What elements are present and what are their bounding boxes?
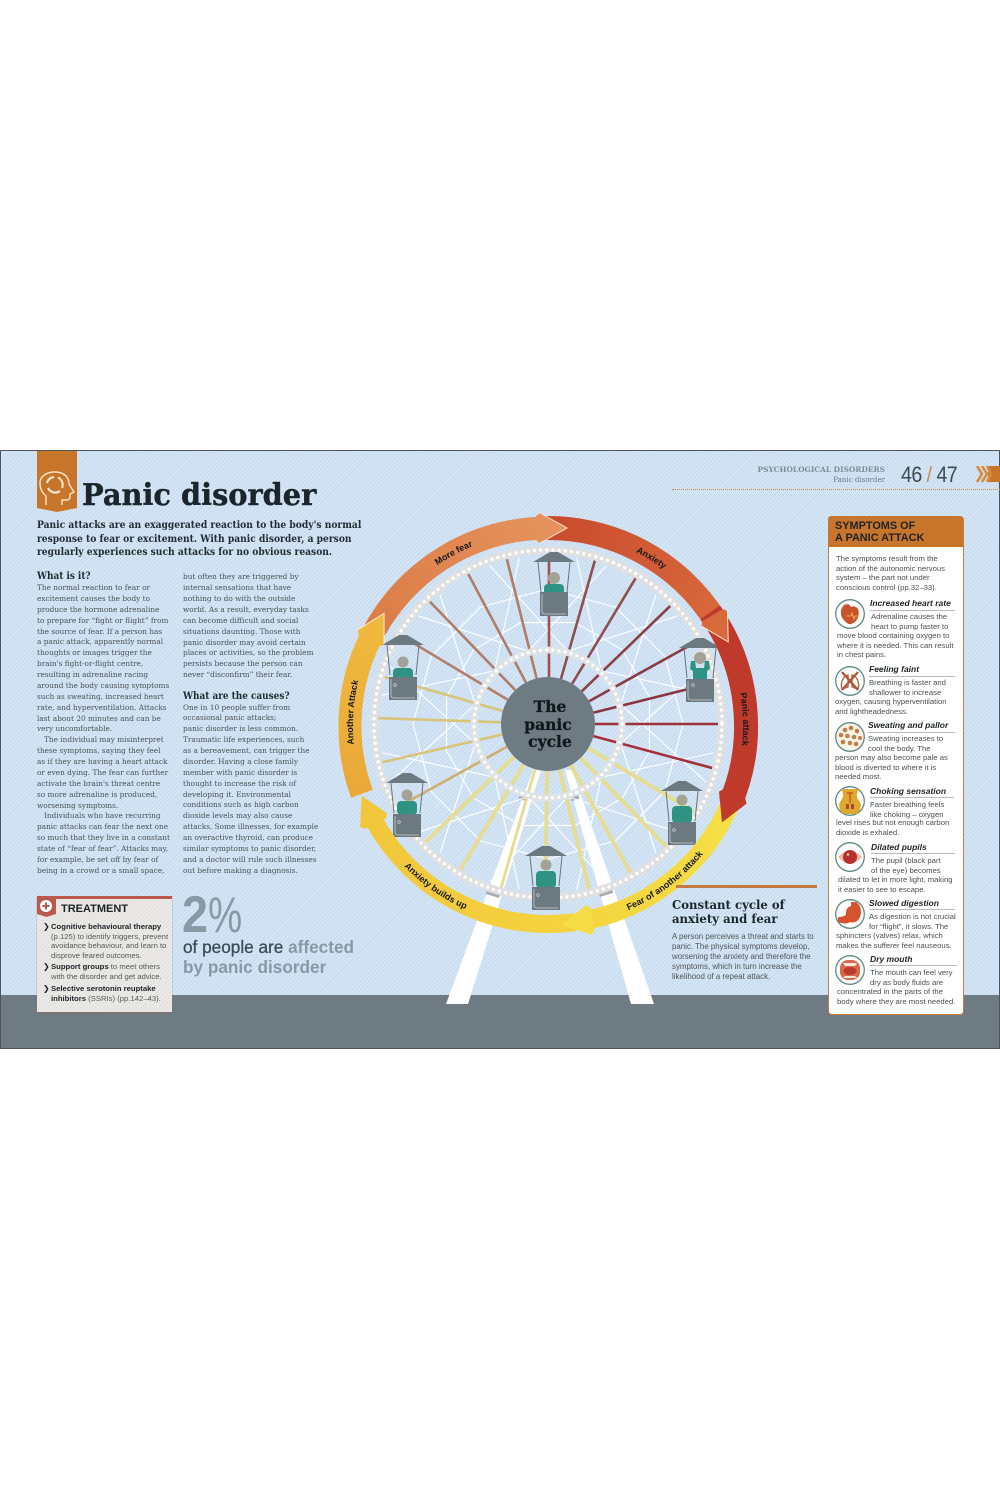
- symptom: dilated pupils: [835, 842, 955, 894]
- text: causes body: dioxide levels may also cause: [182, 811, 292, 820]
- symptom: feeling faint: [835, 664, 955, 716]
- text: causes body: an overactive thyroid, can produce: [182, 833, 313, 842]
- text: causes body: thought to increase the risk of: [182, 779, 296, 788]
- text: what is it body: a panic attack, apparently normal: [37, 637, 163, 646]
- text: causes body: and a doctor will rule such illnesses: [182, 855, 316, 864]
- text: what is it body: as if they are having a heart attack: [37, 757, 167, 766]
- icon: stomach: [835, 899, 865, 929]
- icon: throat: [835, 786, 865, 816]
- symptom: sweating and pallor: blood is diverted to where it is: [835, 763, 936, 772]
- text: what is it body: Individuals who have recurring: [44, 811, 161, 820]
- text: causes body: One in 10 people suffer from: [182, 703, 290, 712]
- symptom text: [870, 968, 952, 987]
- symptoms intro text: conscious control (pp.32–33).: [836, 582, 937, 592]
- panel: symptoms of a panic attack: [828, 516, 964, 1015]
- symptom: dry mouth: concentrated in the parts of the: [837, 987, 943, 996]
- symptom: dry mouth: [835, 954, 957, 1006]
- text: what is it body: [37, 583, 170, 875]
- callout heading: anxiety and fear: [672, 912, 777, 926]
- heading: what is it: What is it?: [37, 571, 91, 582]
- text: what is it body: so more adrenaline is produced,: [37, 790, 157, 799]
- big number: %: [208, 887, 241, 943]
- symptom title: Feeling faint: [869, 664, 919, 674]
- treatment list: (p.125) to identify triggers, prevent: [51, 932, 168, 940]
- symptom text: [870, 800, 944, 819]
- symptom text: of the eye) becomes: [871, 866, 941, 875]
- text: what is it body: activate the brain's threat centre: [37, 779, 160, 788]
- symptom: increased heart rate: move blood containing oxygen to: [837, 631, 949, 640]
- hub: the panic cycle: panic: [524, 715, 572, 734]
- text: what is it body: worsening symptoms.: [37, 800, 118, 810]
- symptoms intro text: action of the autonomic nervous: [836, 564, 945, 572]
- hub: the panic cycle: The: [534, 697, 566, 716]
- white wheel lattice: [382, 558, 714, 890]
- text: what is it body: produce the hormone adrenaline: [37, 605, 159, 614]
- treatment list: ❯: [43, 962, 50, 971]
- text: what is it body: around the body causing symptoms: [37, 681, 169, 690]
- big number: [182, 886, 241, 944]
- treatment top rule: [37, 896, 172, 899]
- intro text: Panic attacks are an exaggerated reaction to the body's normal: [37, 519, 361, 531]
- symptoms intro text: system – the part not under: [836, 573, 930, 582]
- text: causes body: similar symptoms to panic disorder,: [182, 844, 316, 853]
- text: what is it body: The normal reaction to fear or: [37, 583, 150, 592]
- symptom text: As digestion is not crucial: [869, 912, 956, 921]
- text: causes body: [182, 703, 318, 875]
- statistic caption: of people are affected: [183, 937, 354, 957]
- symptom text: cool the body. The: [868, 744, 931, 753]
- text: what is it body: brain's fight-or-flight centre,: [37, 659, 143, 668]
- arrow ring: six-stage cycle: Fear of another attack: [626, 851, 703, 910]
- symptom title: Sweating and pallor: [868, 720, 948, 730]
- title: Panic disorder: [82, 478, 316, 513]
- callout body: likelihood of a repeat attack.: [672, 972, 770, 981]
- symptom: dry mouth: body where they are most needed.: [837, 997, 955, 1006]
- text: causes body: as a bereavement, can trigger the: [182, 746, 309, 755]
- text: what is it body: resulting in adrenaline racing: [37, 670, 148, 679]
- arrow ring: six-stage cycle: Another Attack: [346, 680, 358, 744]
- symptoms header: A PANIC ATTACK: [835, 532, 924, 544]
- symptom text: The pupil (black part: [871, 856, 941, 865]
- statistic: 2%: [182, 886, 354, 977]
- gondola: bottom: [525, 846, 567, 910]
- symptom: dilated pupils: it easier to see to escape.: [838, 885, 926, 894]
- text: column two continuation: can become difficult and social: [182, 616, 298, 625]
- text: column two continuation: but often they are triggered by: [182, 572, 298, 581]
- wheel support legs: [446, 770, 654, 1004]
- heading: what are the causes: What are the causes?: [182, 690, 289, 702]
- symptom: sweating and pallor: needed most.: [835, 772, 882, 781]
- gondola: upper right, hands to head: [679, 638, 721, 702]
- symptom text: like choking – oxygen: [870, 810, 944, 819]
- icon: crossed lungs: [835, 666, 865, 696]
- text: causes body: attacks. Some illnesses, for example: [182, 822, 318, 831]
- callout body: panic. The physical symptoms develop,: [672, 942, 810, 951]
- arrow ring: six-stage cycle: More fear: [434, 542, 472, 565]
- arrow ring: six-stage cycle: Anxiety builds up: [404, 864, 466, 910]
- page background: [0, 450, 1000, 1049]
- panel: treatment: [37, 896, 172, 1012]
- text: what is it body: to prepare for “fight or flight” from: [37, 616, 168, 625]
- symptom title: Dry mouth: [870, 954, 912, 964]
- symptom text: Sweating increases to: [868, 734, 943, 743]
- text: column two continuation: nothing to do with the outside: [182, 594, 295, 603]
- symptom text: Breathing is faster and: [869, 678, 946, 687]
- icon: orange head badge: [37, 451, 77, 512]
- text: causes body: panic disorder is less common.: [182, 724, 298, 733]
- text: causes body: conditions such as high carbon: [182, 800, 298, 809]
- symptom text: [869, 912, 956, 931]
- running header: PSYCHOLOGICAL DISORDERS: [758, 465, 885, 474]
- text: causes body: out before making a diagnosis.: [182, 866, 297, 875]
- symptom title: Slowed digestion: [869, 898, 939, 908]
- treatment list: inhibitors (SSRIs) (pp.142–43).: [51, 994, 161, 1002]
- callout heading: Constant cycle of: [672, 898, 785, 912]
- text: what is it body: very uncomfortable.: [37, 724, 112, 733]
- text: what is it body: thoughts or images trigger the: [37, 648, 152, 657]
- text: column two continuation: world. As a result, everyday tasks: [182, 605, 308, 614]
- symptom: slowed digestion: makes the sufferer feel nauseous.: [836, 941, 952, 950]
- big number: 2: [182, 886, 208, 944]
- text: column two continuation: [182, 572, 314, 679]
- symptom: sweating and pallor: [835, 720, 955, 781]
- text: causes body: occasional panic attacks;: [182, 713, 276, 722]
- symptom text: The mouth can feel very: [870, 968, 952, 977]
- symptoms intro text: [836, 554, 945, 592]
- treatment list: ❯: [43, 984, 50, 993]
- text: column two continuation: situations daunting. Those with: [182, 627, 300, 636]
- gondola: lower left: [386, 773, 428, 837]
- icon: sweat drops: [835, 722, 865, 752]
- gondola: top: [533, 552, 575, 616]
- symptom: feeling faint: oxygen, causing hyperventilation: [835, 697, 947, 706]
- text: what is it body: last about 20 minutes and can be: [37, 714, 161, 722]
- icon: eye: [835, 842, 865, 872]
- callout rule: [676, 885, 817, 888]
- text: column two continuation: internal sensations that have: [182, 583, 291, 592]
- statistic caption: [183, 937, 354, 977]
- hub: the panic cycle: cycle: [528, 732, 572, 751]
- callout body: symptoms, which in turn increase the: [672, 962, 802, 971]
- hub: the panic cycle: [501, 677, 595, 771]
- running header: Panic disorder: [833, 475, 885, 484]
- symptom: slowed digestion: [835, 898, 956, 950]
- callout heading: [672, 898, 786, 926]
- text: column two continuation: panic disorder may avoid certain: [182, 638, 305, 647]
- text: what is it body: panic attacks can fear the next one: [37, 822, 168, 831]
- symptom title: Dilated pupils: [871, 842, 927, 852]
- symptoms header: SYMPTOMS OF: [835, 520, 915, 532]
- text: what is it body: these symptoms, saying they feel: [37, 746, 160, 755]
- treatment list: with the disorder and get advice.: [51, 972, 162, 980]
- text: what is it body: rate, and hyperventilation. Attacks: [37, 703, 167, 712]
- dotted wheel rims: [374, 550, 722, 898]
- text: what is it body: for example, be set off by fear of: [37, 855, 158, 864]
- intro text: response to fear or excitement. With panic disorder, a person: [37, 533, 352, 545]
- running header: [758, 465, 885, 484]
- gondola: upper left: [382, 635, 424, 700]
- text: causes body: disorder. Having a close family: [182, 757, 298, 766]
- symptom: choking sensation: level rises but not enough carbon: [836, 818, 949, 827]
- text: what is it body: so much that they live in a constant: [37, 833, 170, 842]
- text: causes body: Traumatic life experiences, such: [182, 735, 304, 744]
- callout body: [672, 932, 814, 981]
- callout body: worsening the anxiety and therefore the: [672, 952, 811, 961]
- arrow ring: six-stage cycle: [338, 512, 758, 935]
- symptom: dilated pupils: dilated to let in more light, making: [838, 875, 953, 884]
- icon: medical cross badge: [37, 899, 56, 917]
- treatment heading: TREATMENT: [61, 903, 128, 915]
- symptom: choking sensation: [835, 786, 954, 837]
- text: what is it body: being in a crowd or a small space,: [37, 866, 164, 875]
- symptom text: [869, 678, 946, 697]
- statistic caption: by panic disorder: [183, 957, 326, 977]
- symptom: feeling faint: and lightheadedness.: [835, 707, 908, 716]
- text: what is it body: state of “fear of fear”. Attacks may,: [37, 844, 168, 853]
- symptom: slowed digestion: sphincters (valves) relax, which: [836, 931, 943, 940]
- treatment list: [43, 922, 168, 1002]
- icon: mouth: [835, 955, 865, 985]
- symptom text: [868, 734, 943, 753]
- icon: page chevrons: [976, 466, 1000, 483]
- symptom text: [871, 612, 948, 631]
- treatment list: Selective serotonin reuptake: [51, 984, 156, 993]
- symptom: choking sensation: dioxide is exhaled.: [836, 828, 899, 837]
- treatment list: Cognitive behavioural therapy: [51, 922, 161, 931]
- symptom text: for “flight”, it slows. The: [869, 922, 948, 931]
- intro text: regularly experiences such attacks for no obvious reason.: [37, 546, 332, 558]
- symptom: increased heart rate: [835, 598, 955, 659]
- symptom title: Choking sensation: [870, 786, 946, 796]
- treatment list: Support groups to meet others: [51, 962, 160, 971]
- text: what is it body: The individual may misinterpret: [44, 735, 164, 744]
- symptom: increased heart rate: in chest pains.: [837, 650, 886, 659]
- treatment list: ❯: [43, 922, 50, 931]
- callout: constant cycle: [672, 885, 817, 981]
- symptom: sweating and pallor: person may also become pale as: [835, 753, 948, 762]
- symptom text: dry as body fluids are: [870, 978, 943, 987]
- arrow ring: six-stage cycle: Anxiety: [636, 548, 666, 569]
- text: what is it body: such as sweating, increased heart: [37, 692, 164, 701]
- dotted header rule: [672, 489, 1000, 490]
- arrow ring: six-stage cycle: Panic attack: [740, 692, 750, 746]
- text: column two continuation: places or activities, so the problem: [182, 648, 313, 657]
- symptom text: heart to pump faster to: [871, 622, 948, 631]
- text: what is it body: excitement causes the body to: [37, 594, 150, 603]
- ground band: [1, 995, 999, 1048]
- treatment list: avoidance behaviour, and learn to: [51, 941, 166, 950]
- gondola: lower right: [661, 781, 703, 845]
- text: what is it body: or even dying. The fear can further: [37, 768, 168, 777]
- symptom text: [871, 856, 941, 875]
- text: causes body: member with panic disorder is: [182, 768, 297, 777]
- intro text: [37, 519, 362, 558]
- icon: heart: [835, 599, 865, 629]
- symptoms intro text: The symptoms result from the: [836, 554, 938, 563]
- text: column two continuation: never “disconfirm” their fear.: [182, 670, 292, 679]
- symptom title: Increased heart rate: [870, 598, 951, 608]
- symptom text: shallower to increase: [869, 688, 941, 697]
- symptom: increased heart rate: where it is needed. This can result: [837, 641, 954, 650]
- callout body: A person perceives a threat and starts to: [672, 932, 814, 941]
- treatment list: disprove feared outcomes.: [51, 950, 142, 960]
- symptoms header: [828, 516, 963, 547]
- symptom text: Adrenaline causes the: [871, 612, 947, 621]
- text: what is it body: the source of fear. If a person has: [37, 626, 162, 636]
- text: column two continuation: persists because the person can: [182, 659, 302, 668]
- text: causes body: developing it. Environmental: [182, 790, 291, 799]
- symptom text: Faster breathing feels: [870, 800, 944, 809]
- coloured spokes: [378, 554, 718, 894]
- page numbers: 46 / 47: [901, 462, 957, 487]
